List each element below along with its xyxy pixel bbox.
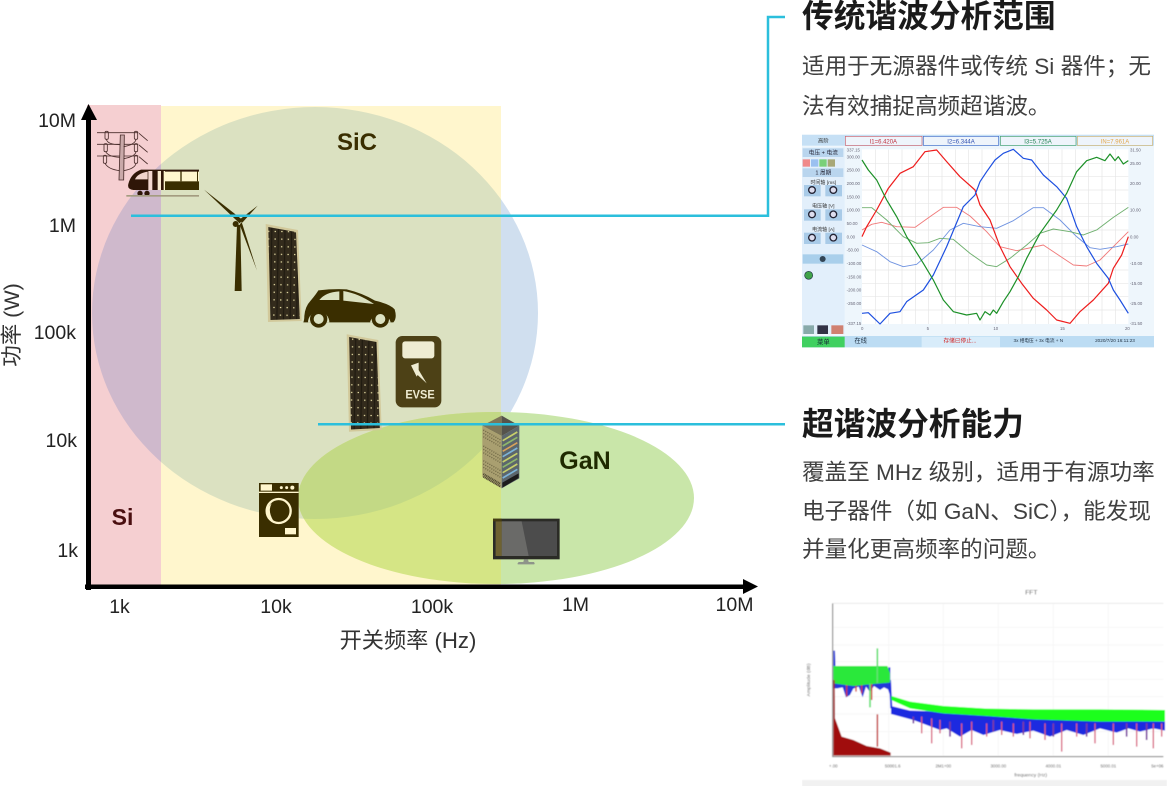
waveform curves [862, 149, 1128, 324]
y axis tick labels: 10k [46, 430, 77, 452]
waveform axis numbers: -200.00 [847, 288, 862, 293]
waveform axis numbers: 0.00 [847, 234, 856, 239]
waveform axis numbers: 250.00 [847, 168, 860, 173]
waveform axis numbers: 15 [1060, 326, 1065, 331]
waveform plot grid [862, 149, 1128, 324]
icon: washing machine [259, 483, 299, 537]
waveform axis numbers: 5 [927, 326, 930, 331]
waveform axis numbers: 100.00 [847, 208, 860, 213]
waveform axis numbers: -10.00 [1130, 261, 1143, 266]
icon: train [126, 170, 199, 197]
heading: supraharmonic analysis capability: 超谐波分析能力 [802, 406, 1024, 442]
label: SiC: SiC [337, 129, 377, 156]
text: supraharmonic description: 覆盖至 MHz 级别，适用于有源功率 [802, 460, 1155, 485]
waveform axis numbers: -150.00 [847, 274, 862, 279]
FFT axis labels [806, 663, 1164, 779]
waveform header readouts [818, 136, 1153, 145]
waveform axis numbers: 20 [1125, 326, 1130, 331]
ellipse: SiC application region [92, 107, 538, 519]
FFT axis labels: 50001.6 [885, 764, 901, 769]
icon: wind turbine [204, 190, 258, 291]
y axis tick labels [34, 110, 78, 562]
screenshot: time-domain waveform [802, 134, 1154, 347]
FFT blue and red traces [833, 651, 1165, 752]
y axis tick labels: 10M [38, 110, 76, 132]
waveform axis numbers: -50.00 [847, 248, 860, 253]
FFT title: FFT [1025, 590, 1037, 597]
FFT axis labels: 4000.01 [1046, 764, 1062, 769]
icon: EVSE charger: EVSE [405, 387, 435, 401]
text: traditional harmonic description [802, 54, 1151, 119]
screenshot: FFT spectrum [802, 585, 1167, 786]
x axis tick labels [109, 594, 753, 618]
waveform axis numbers: 10 [993, 326, 999, 331]
x axis tick labels: 1k [109, 596, 130, 618]
waveform axis numbers: -250.00 [847, 301, 862, 306]
waveform axis numbers: 200.00 [847, 181, 860, 186]
x axis tick labels: 100k [411, 596, 453, 618]
FFT axis labels: frequency (Hz) [1014, 773, 1047, 779]
waveform axis numbers: 31.50 [1130, 148, 1141, 153]
text: supraharmonic description [802, 460, 1155, 562]
waveform header readouts: I1=6.420A [870, 139, 897, 145]
icon: solar panel (lower) [347, 334, 382, 432]
waveform status bar: 2020/7/20 16:11:23 [1095, 338, 1135, 343]
x axis tick labels: 1M [562, 594, 589, 616]
FFT axis labels: 5e+06 [1151, 764, 1164, 769]
icon: solar panel (upper) [266, 224, 302, 322]
FFT axis labels: +.00 [829, 764, 838, 769]
waveform axis numbers: 25.00 [1130, 161, 1141, 166]
waveform axis numbers: -15.00 [1130, 281, 1143, 286]
connector: lower callout line [318, 423, 785, 426]
icon: server rack [482, 416, 519, 488]
icon: power pylon [97, 131, 148, 180]
label: Si: Si [112, 504, 133, 530]
waveform axis numbers [847, 148, 1143, 331]
connector: upper callout line [131, 17, 785, 216]
waveform side controls [802, 147, 845, 334]
y axis with arrow [81, 104, 97, 590]
FFT dark red noise floor [833, 680, 891, 756]
FFT axis labels: 3000.00 [991, 764, 1007, 769]
icon: television [493, 519, 560, 564]
y axis title: 功率 (W) [0, 283, 24, 367]
waveform axis numbers: -25.00 [1130, 301, 1143, 306]
waveform axis numbers: 337.15 [847, 148, 860, 153]
x axis tick labels: 10M [716, 594, 753, 616]
y axis tick labels: 1M [49, 215, 76, 237]
waveform axis numbers: -337.15 [847, 321, 862, 326]
icon: electric car [303, 289, 396, 328]
text: traditional harmonic description: 法有效捕捉高频超谐波。 [802, 94, 1051, 119]
waveform header readouts: I3=5.725A [1024, 139, 1052, 145]
x axis tick labels: 10k [260, 596, 292, 618]
FFT plot frame and grid [833, 603, 1163, 757]
waveform axis numbers: -100.00 [847, 261, 862, 266]
waveform axis numbers: 300.00 [847, 154, 860, 159]
band: Si frequency range [87, 105, 161, 586]
waveform status bar: 菜单 [817, 337, 830, 346]
ellipse: GaN application region [298, 412, 694, 584]
waveform axis numbers: 10.00 [1130, 208, 1141, 213]
FFT green traces [833, 648, 1165, 722]
waveform header readouts: I2=6.344A [947, 139, 975, 145]
FFT axis labels: Amplitude (dB) [806, 663, 812, 696]
waveform side controls: 1 周期 [815, 170, 832, 177]
waveform status bar: 3x 相电压 + 3x 电流 + N [1013, 337, 1063, 344]
band: SiC frequency range [161, 106, 501, 586]
text: traditional harmonic description: 适用于无源器件或传统 Si 器件；无 [802, 54, 1151, 79]
x axis title: 开关频率 (Hz) [340, 628, 476, 653]
waveform status bar: 在线 [854, 336, 868, 345]
waveform axis numbers: 50.00 [847, 221, 858, 226]
text: supraharmonic description: 电子器件（如 GaN、SiC），能发现 [802, 498, 1151, 524]
waveform side controls: 时间轴 [ms] [810, 179, 837, 186]
waveform axis numbers: -31.50 [1130, 321, 1143, 326]
waveform side controls: 电压 + 电流 [809, 149, 838, 157]
FFT axis labels: 2M1+00 [935, 764, 952, 769]
FFT axis labels: 5000.01 [1101, 764, 1117, 769]
waveform status bar: 存储已停止... [943, 336, 977, 344]
waveform side controls: 电压轴 [V] [812, 202, 835, 209]
waveform axis numbers: 0 [861, 326, 864, 331]
x axis with arrow [85, 579, 758, 594]
waveform axis numbers: 20.00 [1130, 181, 1141, 186]
label: GaN: GaN [559, 447, 611, 475]
y axis tick labels: 100k [34, 322, 76, 344]
icon: EVSE charger [396, 336, 441, 407]
waveform axis numbers: 150.00 [847, 194, 860, 199]
waveform header readouts: IN=7.961A [1101, 139, 1129, 145]
waveform header readouts: 高阶 [818, 136, 829, 144]
waveform status bar [802, 336, 1154, 347]
waveform axis numbers: 0.00 [1130, 234, 1139, 239]
y axis tick labels: 1k [57, 540, 78, 562]
text: supraharmonic description: 并量化更高频率的问题。 [802, 537, 1051, 562]
waveform side controls: 电流轴 [A] [812, 226, 835, 233]
